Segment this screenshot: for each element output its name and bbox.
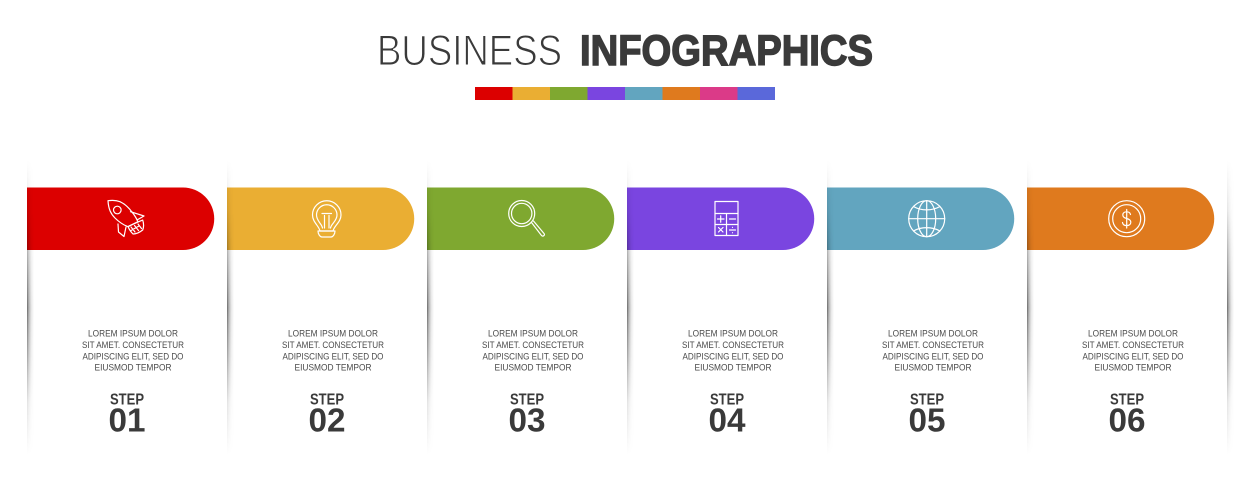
title: INFOGRAPHICS <box>580 27 873 75</box>
step label: step 2: STEP <box>310 392 344 408</box>
description: step 2 <box>282 328 384 374</box>
description: step 5: EIUSMOD TEMPOR <box>894 362 972 374</box>
panel: step 1 <box>27 188 214 438</box>
description: step 3: SIT AMET. CONSECTETUR <box>482 340 584 351</box>
description: step 4: EIUSMOD TEMPOR <box>694 362 772 374</box>
description: step 2: ADIPISCING ELIT, SED DO <box>282 352 384 362</box>
step label: step 1: STEP <box>110 392 144 408</box>
step label: step 3: 03 <box>508 402 546 438</box>
panel: step 4 <box>627 188 814 438</box>
description: step 3: ADIPISCING ELIT, SED DO <box>482 352 584 362</box>
description: step 5: ADIPISCING ELIT, SED DO <box>882 352 984 362</box>
description: step 1 <box>82 328 184 374</box>
step label: step 5: 05 <box>908 402 946 438</box>
step label: step 5: STEP <box>910 392 944 408</box>
description: step 4: ADIPISCING ELIT, SED DO <box>682 352 784 362</box>
icon: light bulb <box>312 201 341 237</box>
description: step 5 <box>882 328 984 374</box>
description: step 6: EIUSMOD TEMPOR <box>1094 362 1172 374</box>
title <box>377 27 873 75</box>
panel: step 6 <box>1027 188 1214 438</box>
description: step 4 <box>682 328 784 374</box>
banner: step 2 <box>227 188 414 250</box>
description: step 4: SIT AMET. CONSECTETUR <box>682 340 784 351</box>
banner: step 4 <box>627 188 814 250</box>
icon: calculator <box>715 202 738 236</box>
description: step 6: SIT AMET. CONSECTETUR <box>1082 340 1184 351</box>
banner: step 1 <box>27 188 214 250</box>
step label: step 6: STEP <box>1110 392 1144 408</box>
description: step 5: SIT AMET. CONSECTETUR <box>882 340 984 351</box>
description: step 4: LOREM IPSUM DOLOR <box>688 328 778 340</box>
description: step 3: EIUSMOD TEMPOR <box>494 362 572 374</box>
icon: magnifying glass <box>509 200 544 236</box>
description: step 6 <box>1082 328 1184 374</box>
step label: step 6: 06 <box>1108 402 1146 438</box>
description: step 1: ADIPISCING ELIT, SED DO <box>82 352 184 362</box>
card edge shadows <box>27 178 1233 439</box>
step label: step 1: 01 <box>108 402 146 438</box>
step label: step 2: 02 <box>308 402 346 438</box>
description: step 1: SIT AMET. CONSECTETUR <box>82 340 184 351</box>
description: step 1: EIUSMOD TEMPOR <box>94 362 172 374</box>
description: step 2: LOREM IPSUM DOLOR <box>288 328 378 340</box>
panel: step 3 <box>427 188 614 438</box>
banner: step 5 <box>827 188 1014 250</box>
banner: step 6 <box>1027 188 1214 250</box>
description: step 5: LOREM IPSUM DOLOR <box>888 328 978 340</box>
colour strip <box>475 87 775 100</box>
icon: rocket <box>108 200 144 236</box>
description: step 6: ADIPISCING ELIT, SED DO <box>1082 352 1184 362</box>
step label: step 4: 04 <box>708 402 746 438</box>
step label: step 3: STEP <box>510 392 544 408</box>
panel: step 2 <box>227 188 414 438</box>
title: BUSINESS <box>377 27 562 75</box>
icon: dollar coin <box>1109 201 1145 237</box>
description: step 2: SIT AMET. CONSECTETUR <box>282 340 384 351</box>
description: step 3 <box>482 328 584 374</box>
description: step 3: LOREM IPSUM DOLOR <box>488 328 578 340</box>
panel: step 5 <box>827 188 1014 438</box>
description: step 6: LOREM IPSUM DOLOR <box>1088 328 1178 340</box>
icon: globe <box>909 201 945 237</box>
banner: step 3 <box>427 188 614 250</box>
step label: step 4: STEP <box>710 392 744 408</box>
description: step 2: EIUSMOD TEMPOR <box>294 362 372 374</box>
description: step 1: LOREM IPSUM DOLOR <box>88 328 178 340</box>
